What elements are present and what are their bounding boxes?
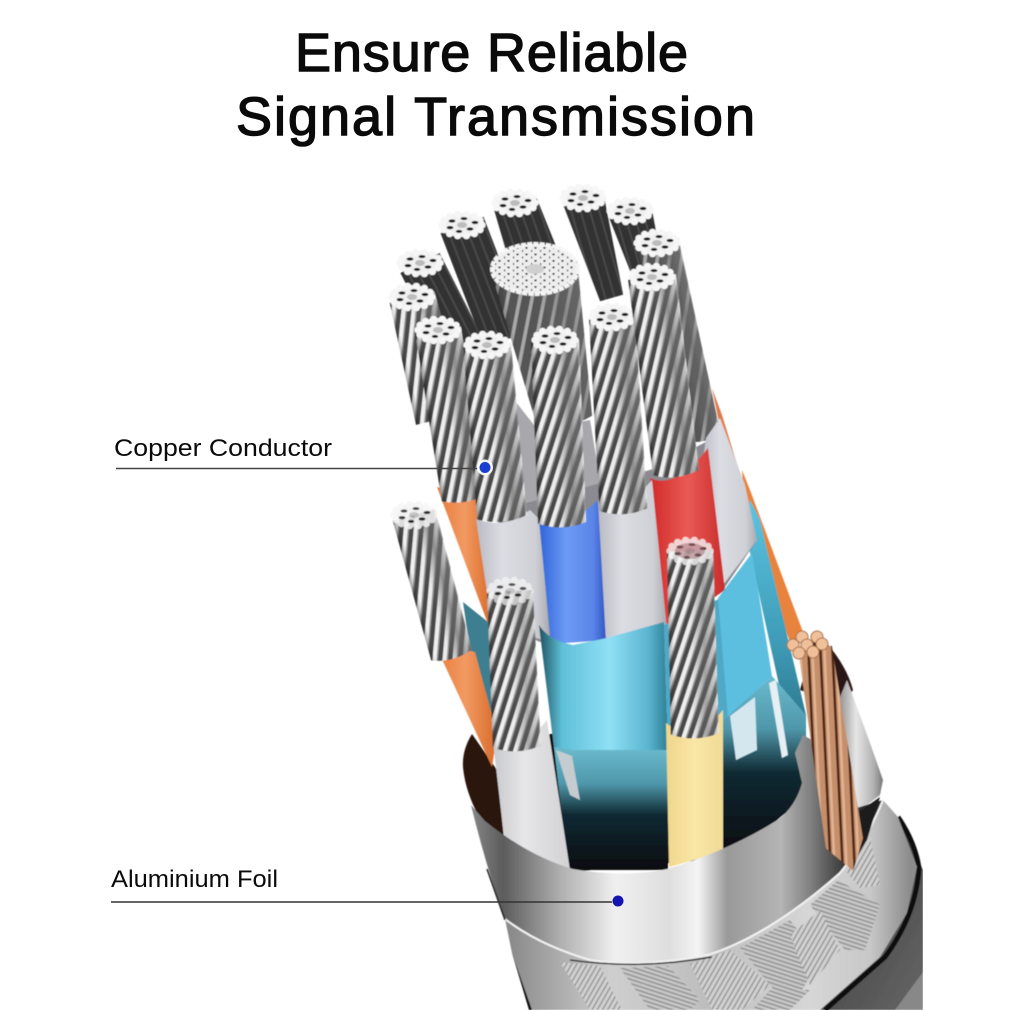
- wire L: [588, 303, 648, 516]
- foil interior, back side: [463, 632, 883, 872]
- wire N: [390, 501, 474, 665]
- insulated tubes: orange, grey, blue, grey, red: [437, 418, 757, 644]
- copper conductor: [787, 631, 867, 874]
- far right orange conductor and teal strip: [742, 470, 806, 735]
- title: Signal Transmission: [236, 87, 755, 147]
- cable illustration: [386, 184, 923, 1010]
- title: [236, 23, 755, 147]
- white insulated tube: [493, 720, 570, 870]
- title: Ensure Reliable: [295, 23, 688, 83]
- big centre wire: [492, 244, 608, 434]
- right rear wire: [633, 229, 725, 446]
- rear dark wires: [396, 184, 671, 370]
- silver braided shield: [505, 800, 917, 1010]
- callout: aluminium foil: [111, 866, 624, 906]
- teal shielding foil band: [463, 553, 806, 870]
- wire O: [486, 577, 541, 752]
- callout: copper conductor: Copper Conductor: [114, 435, 332, 462]
- lower left orange conductor: [434, 642, 497, 767]
- outer black jacket: [512, 817, 923, 1010]
- wire P: [666, 537, 719, 739]
- callout: aluminium foil: Aluminium Foil: [111, 866, 278, 893]
- wire H: [386, 283, 468, 425]
- wire J: [462, 331, 527, 524]
- wire I: [414, 316, 488, 505]
- orange sliver: [712, 388, 745, 500]
- dark fill behind tubes: [490, 440, 757, 642]
- front steel conductors: [386, 263, 700, 665]
- gray tube behind centre: [505, 392, 605, 525]
- wire K: [531, 326, 586, 528]
- callout: copper conductor: [114, 435, 493, 476]
- yellow insulated tube: [666, 710, 723, 867]
- aluminium foil band: [471, 735, 883, 964]
- wire M: [628, 263, 700, 480]
